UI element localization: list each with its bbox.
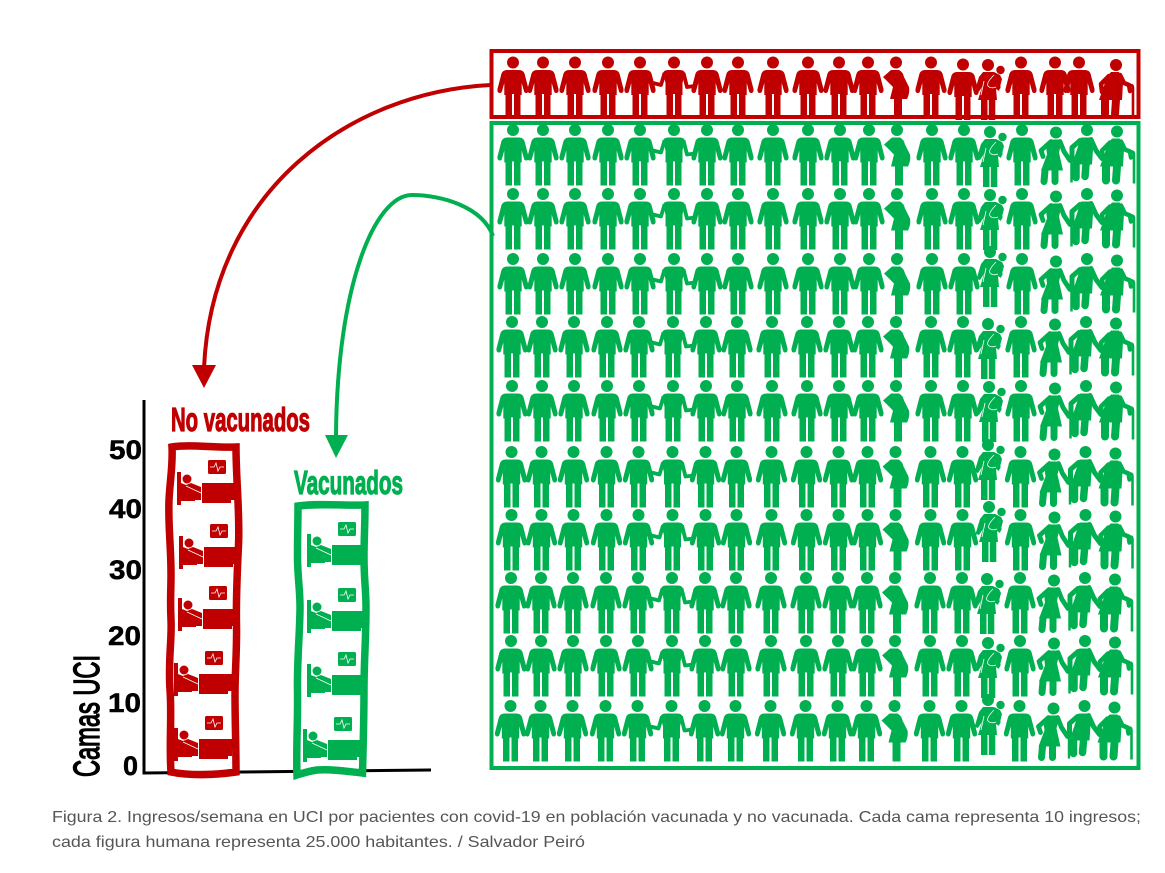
bar outline: no vacunados (169, 446, 239, 775)
caption (52, 809, 1141, 851)
row 7 of people (496, 501, 1133, 570)
green arrow: vacunados (325, 195, 493, 458)
label: no vacunados: No vacunados (171, 401, 310, 438)
bar outline: vacunados (297, 505, 366, 775)
axis labels: 30 (109, 555, 142, 585)
axis labels: 20 (108, 621, 141, 651)
caption: Figura 2. Ingresos/semana en UCI por pacientes con covid-19 en población vacunada y no vacunada. Cada cama representa 10 ingresos; (52, 809, 1141, 826)
axis labels: 10 (108, 688, 141, 718)
row 3 of people (497, 246, 1134, 314)
row 1 of people (497, 124, 1134, 187)
row 8 of people (495, 572, 1132, 634)
panel: vaccinated population (492, 123, 1138, 768)
bed icons: no vacunados (174, 460, 237, 761)
row 6 of people (496, 439, 1133, 508)
row 9 of people (495, 635, 1132, 698)
axis labels: 40 (109, 494, 142, 524)
bed icons: vacunados (303, 522, 365, 762)
red arrow: no vacunados (192, 85, 491, 388)
row 2 of people (497, 188, 1134, 250)
panel: unvaccinated population (492, 51, 1138, 120)
row 4 of people (496, 316, 1133, 379)
label: vacunados: Vacunados (294, 464, 403, 501)
y axis and baseline (144, 400, 431, 773)
row 5 of people (496, 380, 1133, 442)
axis labels: 50 (109, 435, 142, 465)
row 10 of people (495, 694, 1132, 762)
axis labels (108, 435, 142, 781)
axis title: Camas UCI (66, 655, 107, 777)
axis labels: 0 (123, 751, 138, 781)
caption: cada figura humana representa 25.000 habitantes. / Salvador Peiró (52, 834, 585, 851)
